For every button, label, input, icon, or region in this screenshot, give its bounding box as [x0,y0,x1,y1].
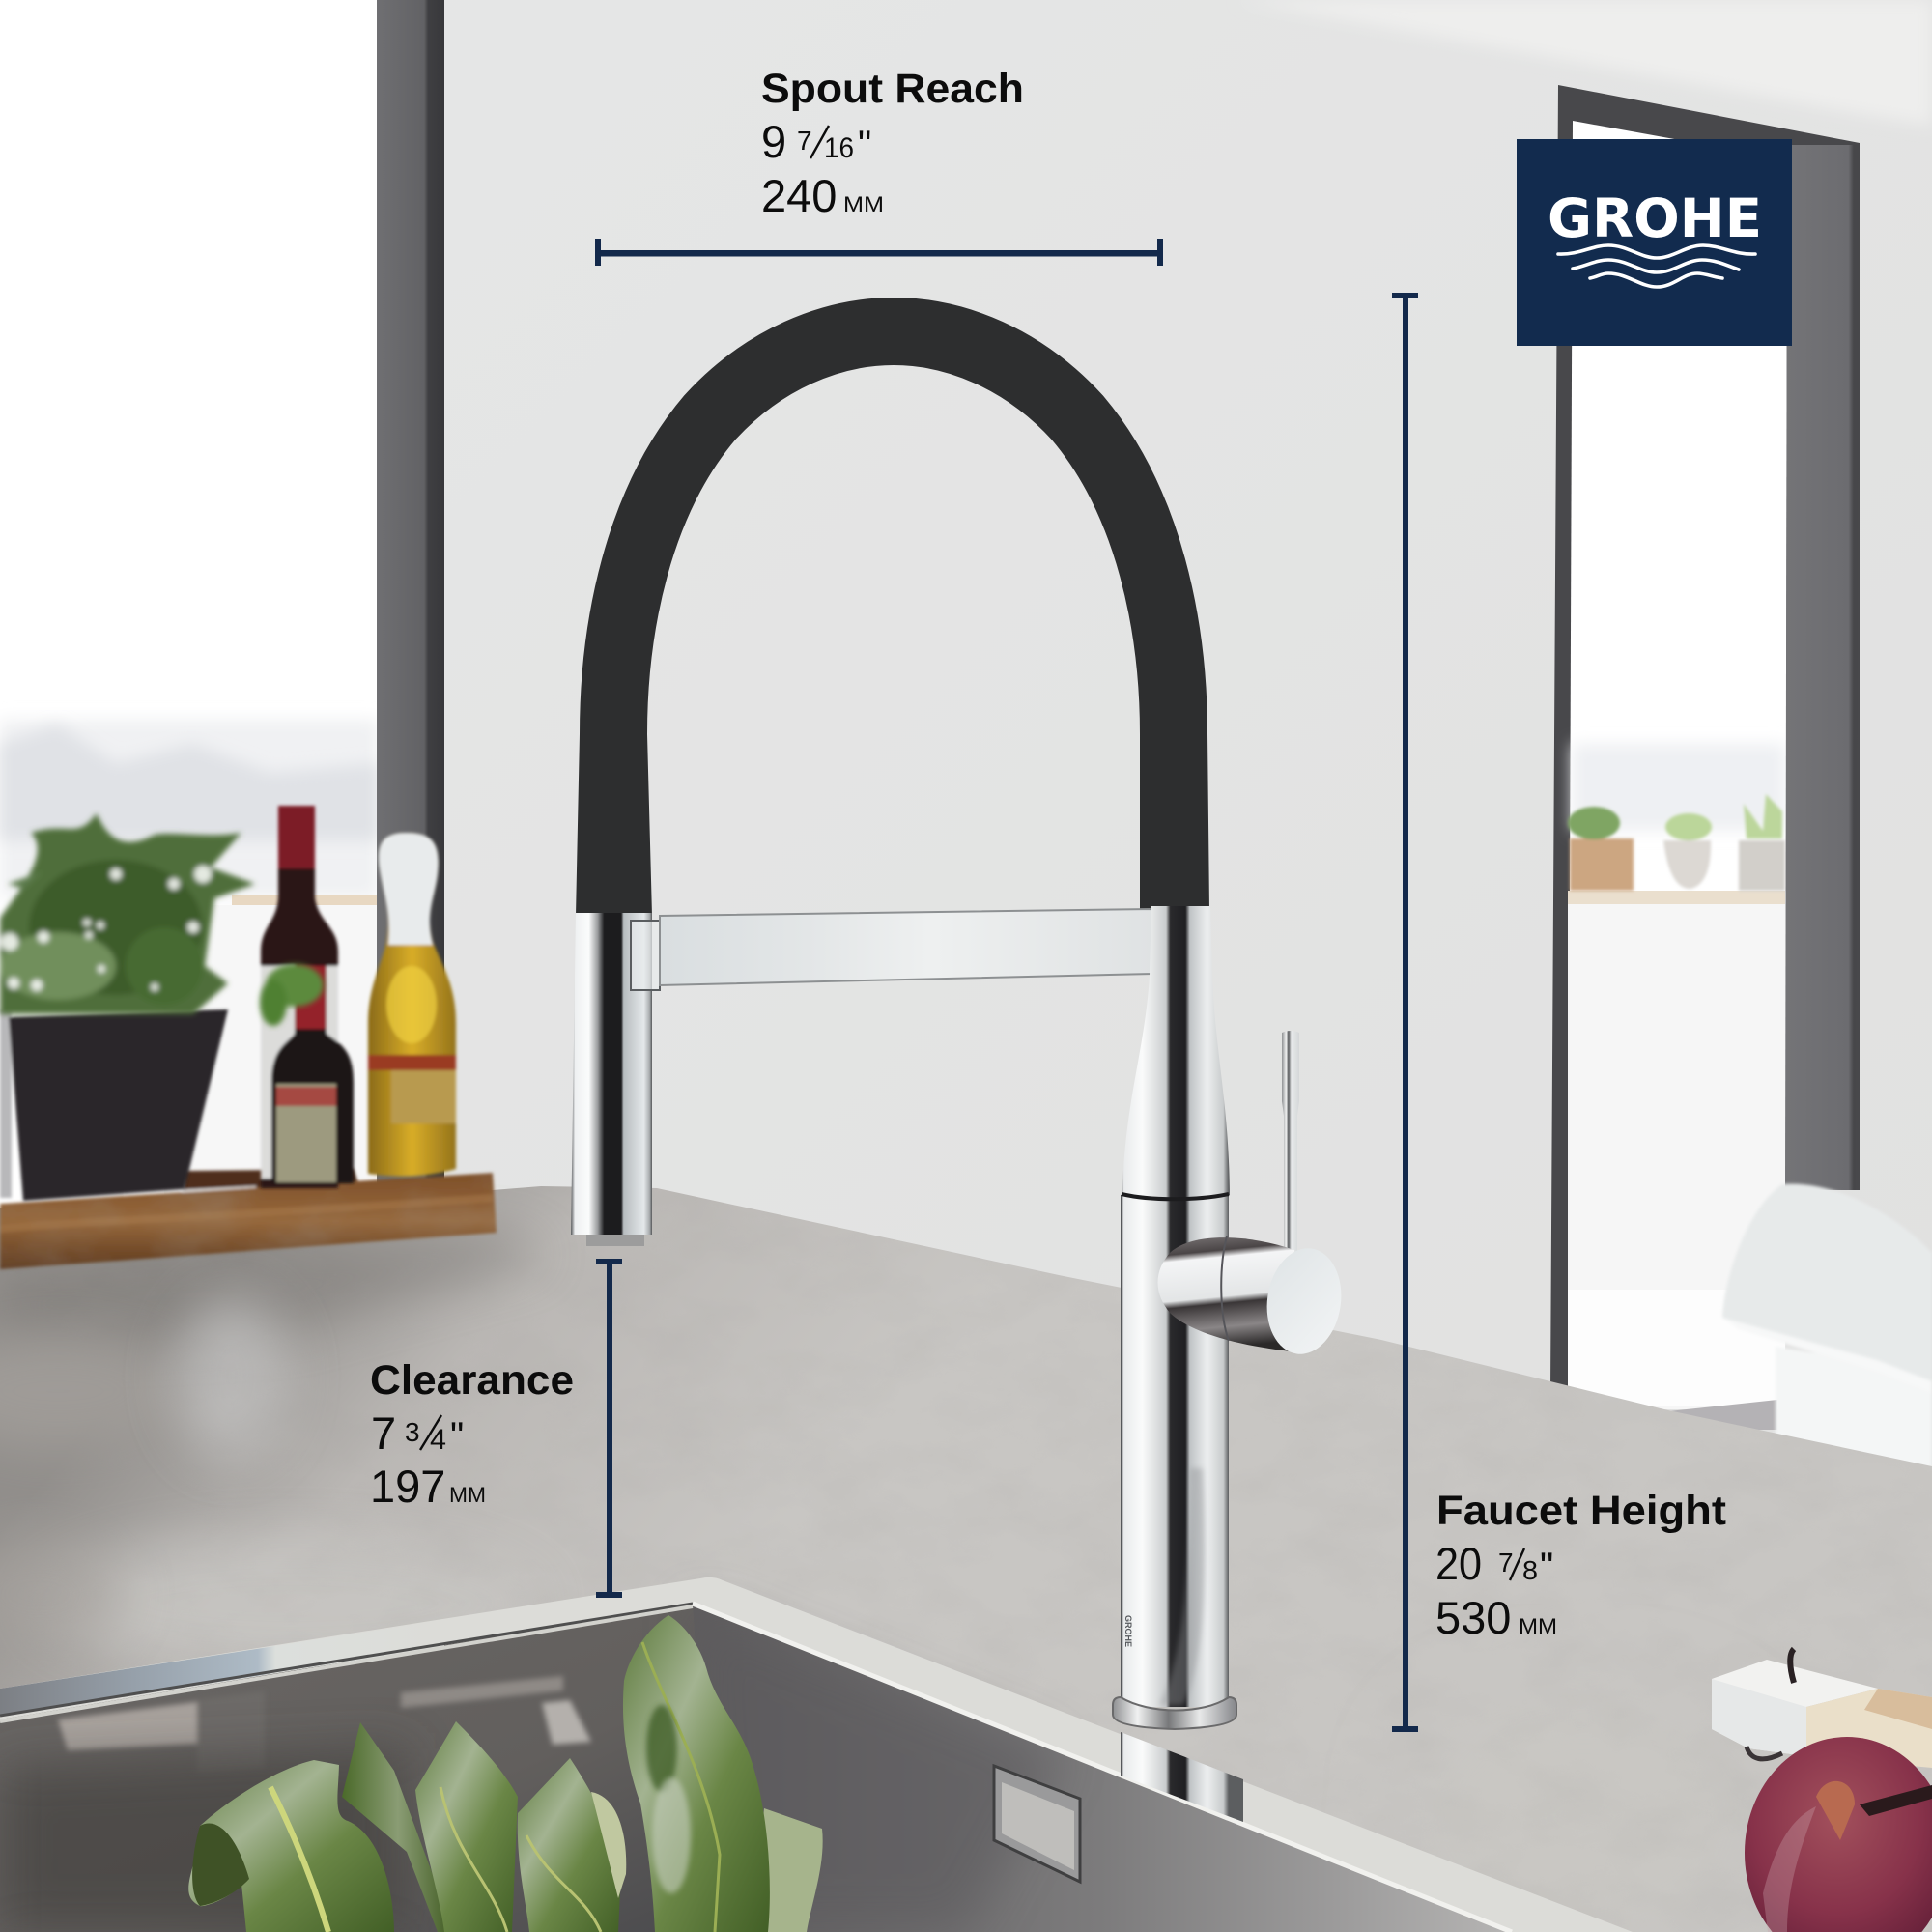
label: clearance: 7 [371,1407,396,1459]
dimension: faucet height [1392,293,1418,1732]
label: clearance: MM [449,1483,486,1507]
leaf pale stem [591,1792,626,1898]
leaves [188,1615,823,1932]
small dark bottle [271,966,354,1183]
overflow square [994,1766,1080,1882]
left window with blurred skyline [0,0,379,1217]
black flexible hose [576,331,1209,916]
green plant [0,813,324,1026]
faucet [571,331,1348,1729]
label: clearance: " [450,1415,464,1458]
oil bottle [368,833,456,1177]
leaf small right [753,1808,823,1932]
sink right wall [693,1604,1507,1932]
label: spout reach: MM [843,192,884,216]
label: spout reach: Spout Reach [761,66,1024,112]
ceiling highlight [1236,0,1932,126]
horizontal bridge bar [660,909,1152,985]
dark window mullion [377,0,444,1198]
label: faucet height: " [1540,1546,1553,1588]
faucet body neck [1122,906,1230,1195]
engraved logo on body: GROHE [1123,1615,1133,1647]
right door frame and window [1550,85,1860,1430]
white chair [1722,1184,1932,1478]
sink left wall [0,1604,734,1932]
white block with wooden board [1712,1649,1932,1768]
faucet base [1113,1697,1236,1729]
dimension: clearance [596,1259,622,1598]
label: clearance: 4 [430,1424,446,1456]
window sill [1568,891,1785,904]
spray head [571,913,660,1246]
red onion [1745,1737,1932,1932]
sink rim [0,1577,1633,1932]
faucet reflection on rim [1121,1732,1243,1822]
label: spout reach: " [858,124,871,166]
lever cylinder [1157,1237,1299,1352]
bottles [261,806,456,1188]
sink wall reflections [58,1676,591,1773]
leaf five [518,1758,622,1932]
label: faucet height: 20 [1435,1538,1482,1589]
leaf four [415,1721,518,1932]
label: clearance: 197 [370,1461,445,1512]
label: spout reach [761,66,1024,221]
black plant pot [0,1009,228,1201]
label: clearance [370,1357,574,1512]
wooden tray [0,1169,497,1269]
leaf folded [188,1760,394,1932]
label: spout reach: 9 [761,116,786,167]
window plants [1568,794,1785,891]
lever disc [1261,1243,1348,1359]
label: faucet height: Faucet Height [1436,1488,1726,1534]
leaf three [342,1722,454,1932]
right thick frame post [1785,145,1860,1190]
tall wine bottle [261,806,338,1188]
body lower reflection [1159,1468,1205,1705]
logo waves [1558,245,1755,287]
countertop [0,1186,1932,1932]
label: faucet height: 530 [1435,1592,1511,1643]
faucet body lower [1121,1195,1229,1707]
label: clearance: Clearance [370,1357,574,1404]
label: faucet height: 7 [1498,1548,1514,1577]
tall leaf [623,1615,770,1932]
dimension: spout reach [595,239,1163,266]
lever stick [1282,1031,1299,1256]
label: faucet height: MM [1519,1614,1557,1638]
label: spout reach: 7 [797,126,812,156]
label: faucet height [1435,1488,1726,1643]
label: clearance: 3 [405,1417,420,1447]
counter tone patches [0,1235,1739,1922]
sink [0,1577,1633,1932]
label: spout reach: 16 [824,132,854,164]
GROHE logo: GROHE [1548,187,1762,249]
label: faucet height: 8 [1522,1555,1538,1585]
GROHE logo [1517,139,1792,346]
label: spout reach: 240 [761,170,837,221]
